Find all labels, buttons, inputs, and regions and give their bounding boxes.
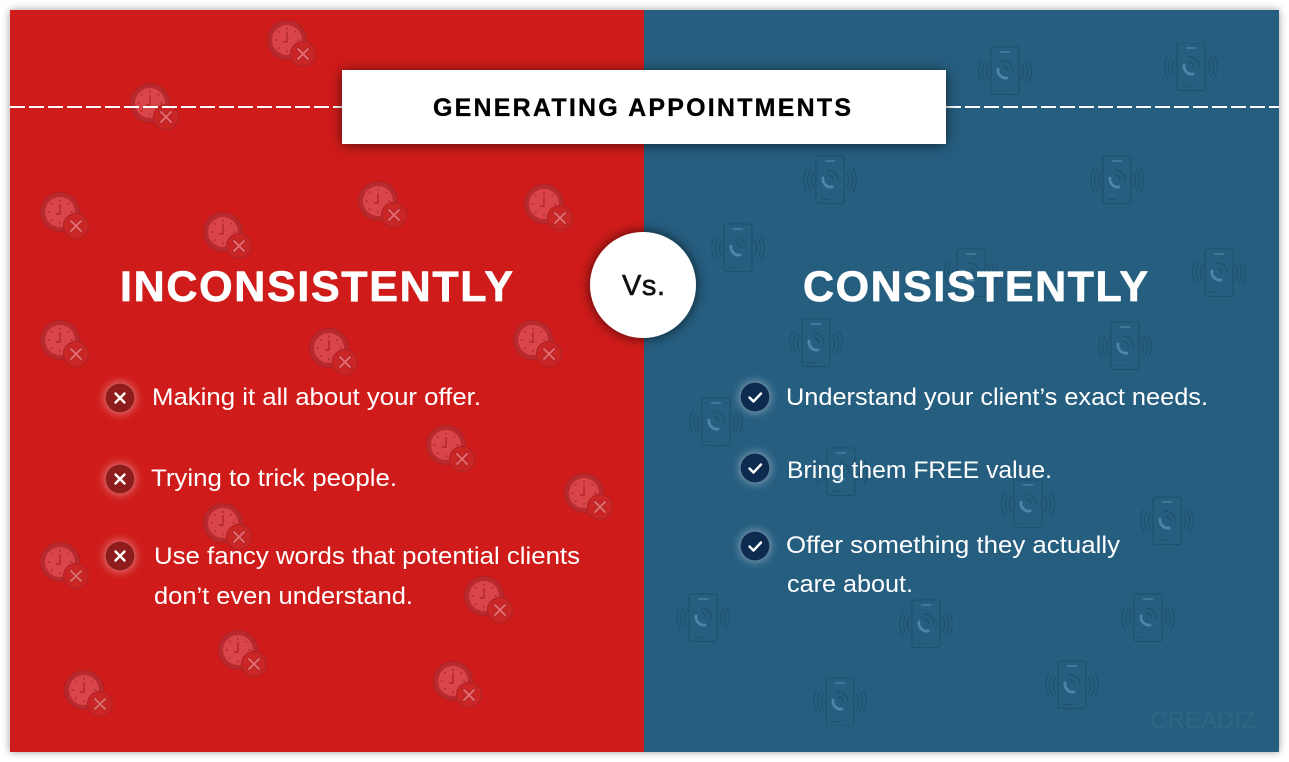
list item: needs: Understand your client’s exact needs. [786, 384, 1208, 411]
list: consistent behaviours [740, 382, 1208, 598]
title banner: GENERATING APPOINTMENTS [433, 94, 851, 122]
list: inconsistent behaviours [106, 384, 580, 610]
list item: fancy words [106, 542, 580, 610]
list item: offer: Making it all about your offer. [152, 384, 481, 411]
list item: fancy words: Use fancy words that potential clients [154, 543, 580, 570]
list item: fancy words: don’t even understand. [154, 583, 413, 610]
heading: consistently: CONSISTENTLY [803, 263, 1148, 311]
versus badge [590, 232, 696, 338]
versus badge: Vs. [622, 270, 665, 302]
list item: care about [740, 532, 1120, 598]
list item: care about: Offer something they actually [786, 532, 1120, 559]
list item: free value: Bring them FREE value. [787, 457, 1052, 484]
watermark: CREADIZ [1150, 707, 1256, 734]
title banner [342, 70, 946, 144]
list item: trick: Trying to trick people. [151, 465, 397, 492]
heading: inconsistently: INCONSISTENTLY [120, 263, 513, 311]
panel: inconsistently (red side) [10, 10, 644, 752]
list item: care about: care about. [787, 571, 913, 598]
panel: consistently (blue side) [644, 10, 1279, 752]
